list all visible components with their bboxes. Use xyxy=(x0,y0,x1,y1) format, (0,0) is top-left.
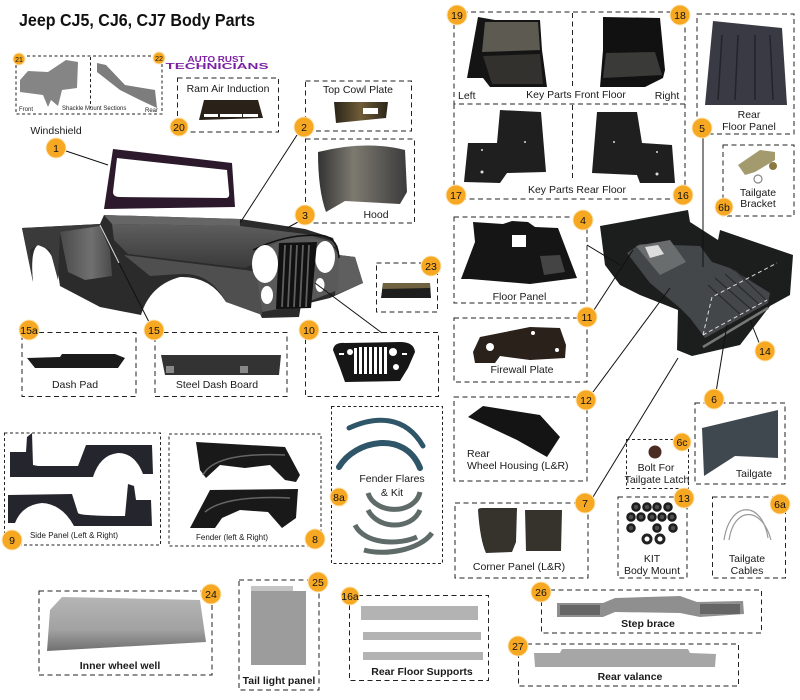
panel: key parts front floor: Key Parts Front Floor xyxy=(526,89,626,101)
panel: key parts rear floor: Key Parts Rear Floor xyxy=(528,184,627,196)
number badges: 8 xyxy=(312,534,318,546)
labels: shackle mount: Front xyxy=(19,107,33,113)
number badges: 21 xyxy=(15,57,23,64)
number badges: 23 xyxy=(425,261,437,273)
panel: shackle mount sections xyxy=(16,56,162,114)
panel: rear floor supports xyxy=(350,596,488,680)
leader line: part 5 xyxy=(702,138,704,267)
number badges: 25 xyxy=(312,577,324,589)
number badges: 24 xyxy=(205,589,217,601)
number badges: 22 xyxy=(155,56,163,63)
number badges: 16a xyxy=(341,591,359,603)
panel: hood: Hood xyxy=(363,209,389,221)
logo: Auto Rust Technicians: TECHNICIANS xyxy=(166,62,270,71)
leader lines xyxy=(66,135,382,333)
number badges: 6a xyxy=(774,499,786,511)
labels: shackle mount: Rear xyxy=(145,108,158,114)
panel: steel dash board: Steel Dash Board xyxy=(176,379,258,391)
title: Jeep CJ5, CJ6, CJ7 Body Parts xyxy=(19,10,255,30)
labels: shackle mount: Shackle Mount Sections xyxy=(62,106,126,112)
panel: fender xyxy=(169,434,321,546)
number badges: 6 xyxy=(711,394,717,406)
panel: rear floor panel: Floor Panel xyxy=(722,121,776,133)
number badges: 14 xyxy=(759,346,771,358)
panel: inner wheel well: Inner wheel well xyxy=(80,660,160,672)
number badges: 15 xyxy=(148,325,160,337)
panel: key parts rear floor xyxy=(454,104,685,199)
number badges: 27 xyxy=(512,641,524,653)
panel: top cowl plate: Top Cowl Plate xyxy=(323,84,393,96)
panel: dash pad: Dash Pad xyxy=(52,379,98,391)
panel: fender flares and kit xyxy=(332,406,442,564)
panel: fender flares and kit: & Kit xyxy=(381,487,403,499)
panel: inner wheel well xyxy=(39,591,212,675)
panel: step brace: Step brace xyxy=(621,618,675,630)
panel: corner panel xyxy=(455,503,588,578)
panel: steel dash board xyxy=(155,332,287,396)
panel: floor panel xyxy=(454,217,587,303)
number badges: 5 xyxy=(699,123,705,135)
logo: Auto Rust Technicians xyxy=(166,55,270,71)
number badges: 6b xyxy=(718,202,730,214)
number badges: 12 xyxy=(580,395,592,407)
number badges: 18 xyxy=(674,10,686,22)
panel: tailgate cables xyxy=(712,497,786,578)
panel: ram air induction: Ram Air Induction xyxy=(187,83,270,95)
panel: side panel: Side Panel (Left & Right) xyxy=(30,531,118,540)
panel: key parts front floor: Right xyxy=(655,90,679,102)
number badges: 26 xyxy=(535,587,547,599)
panel: tail light panel xyxy=(239,580,319,690)
panel: rear valance: Rear valance xyxy=(598,671,663,683)
panel: top cowl plate xyxy=(306,81,412,131)
panel: firewall plate xyxy=(454,318,587,382)
number badges: 15a xyxy=(20,325,38,337)
part: jeep rear tub xyxy=(600,210,793,356)
panel: tailgate cables: Cables xyxy=(731,565,763,577)
panel: tailgate bracket: Bracket xyxy=(740,198,776,210)
panel: step brace xyxy=(542,590,762,633)
panel: tailgate: Tailgate xyxy=(736,468,772,480)
leader line: part 14 xyxy=(750,320,760,345)
number badges: 8a xyxy=(333,492,345,504)
number badges: 6c xyxy=(676,437,688,449)
number badges: 1 xyxy=(53,143,59,155)
panel: corner panel: Corner Panel (L&R) xyxy=(473,561,565,573)
panel: rear floor panel: Rear xyxy=(738,109,761,121)
panel: bolt for tailgate latch: Bolt For xyxy=(638,462,675,474)
panel: body mount kit: Body Mount xyxy=(624,565,680,577)
panel: bolt for tailgate latch: Tailgate Latch xyxy=(625,474,690,486)
leader lines over tub xyxy=(587,245,727,497)
headlights xyxy=(252,245,278,283)
number badges: 16 xyxy=(677,190,689,202)
grille xyxy=(276,242,317,309)
panel: rear floor supports: Rear Floor Supports xyxy=(371,666,473,678)
panel: tailgate bracket: Tailgate xyxy=(740,187,776,199)
panel: key parts front floor: Left xyxy=(458,90,476,102)
number badges: 19 xyxy=(451,10,463,22)
panel: tailgate cables: Tailgate xyxy=(729,553,765,565)
panel: hood xyxy=(306,139,414,223)
label: windshield: Windshield xyxy=(30,125,82,137)
logo: Auto Rust Technicians: AUTO RUST xyxy=(188,55,245,64)
number badges: 7 xyxy=(582,498,588,510)
panel: rear floor panel xyxy=(697,14,794,134)
panel: body mount kit xyxy=(618,497,687,578)
panel: tail light panel: Tail light panel xyxy=(243,675,315,687)
number badges: 3 xyxy=(302,210,308,222)
panel: rear wheel housing xyxy=(454,397,587,481)
part: windshield frame xyxy=(104,149,235,209)
number badges: 10 xyxy=(303,325,315,337)
part: jeep front clip body xyxy=(22,215,363,318)
panel: body mount kit: KIT xyxy=(644,553,661,565)
part: rear shackle mount xyxy=(97,63,157,108)
panel: grille xyxy=(306,332,438,396)
panel: tailgate bracket xyxy=(723,145,794,216)
panel: bolt for tailgate latch xyxy=(625,440,690,488)
panel: tailgate xyxy=(695,403,785,484)
number badges: 17 xyxy=(450,190,462,202)
number badges: 13 xyxy=(678,493,690,505)
panel: side panel xyxy=(4,433,160,545)
number badges: 2 xyxy=(301,122,307,134)
panel: fender flares and kit: Fender Flares xyxy=(359,473,425,485)
panel: firewall plate: Firewall Plate xyxy=(490,364,554,376)
number badges: 4 xyxy=(580,215,586,227)
panel: part 23 xyxy=(376,263,438,312)
number badges: 11 xyxy=(582,312,593,324)
panel: fender: Fender (left & Right) xyxy=(196,533,268,542)
number badges: 20 xyxy=(173,122,185,134)
part: front shackle mount xyxy=(20,60,78,107)
panel: floor panel: Floor Panel xyxy=(493,291,546,303)
panel: dash pad xyxy=(22,332,136,396)
panel: key parts front floor xyxy=(454,12,685,104)
number badges: 9 xyxy=(9,535,15,547)
panel: rear wheel housing: Rear xyxy=(467,448,490,460)
panel: rear wheel housing: Wheel Housing (L&R) xyxy=(467,460,569,472)
panel: ram air induction xyxy=(178,78,278,132)
panel: rear valance xyxy=(518,644,738,686)
